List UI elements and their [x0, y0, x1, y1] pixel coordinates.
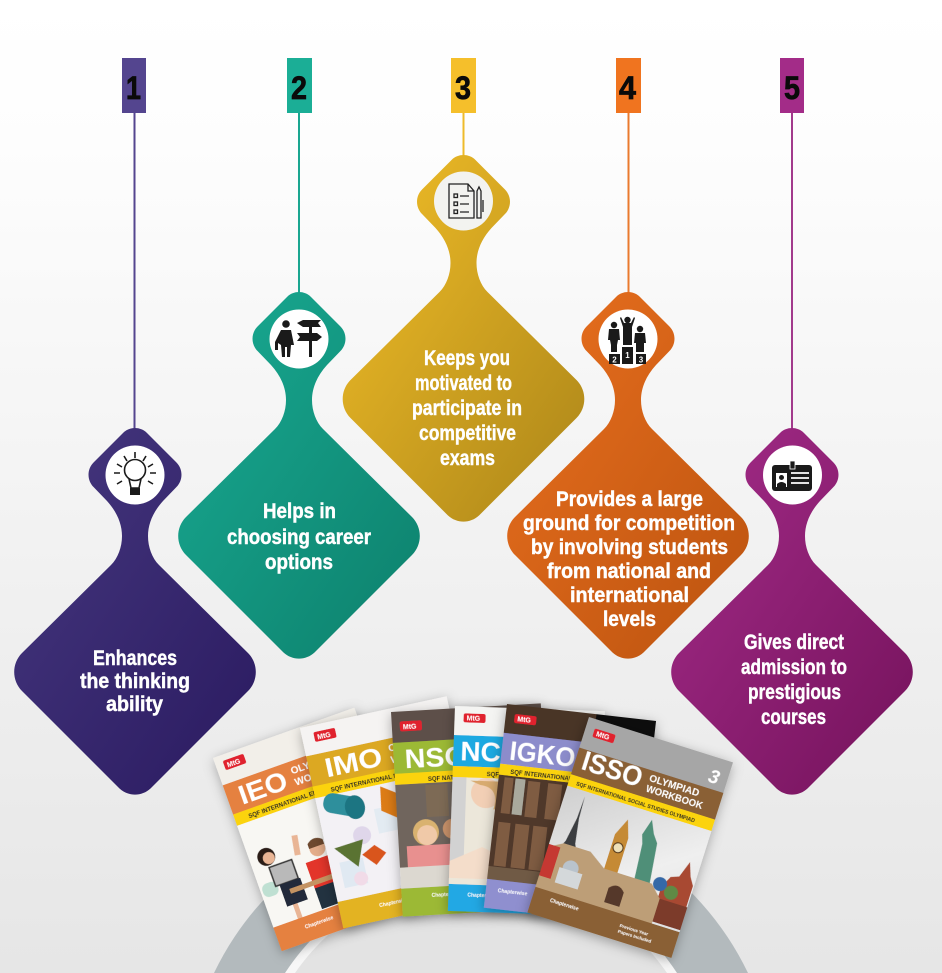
drop shape 1: [14, 428, 256, 795]
book: IEO: IEO: [234, 765, 292, 810]
item 5: direct admission: [671, 58, 913, 795]
text 3: motivated to: [415, 372, 512, 395]
text 4: from national and: [547, 560, 711, 583]
book: NCO: Chapterwise: [467, 893, 497, 900]
drop shape 4: [507, 292, 749, 659]
text 3: competitive: [419, 422, 516, 445]
book: ISSO: Previous Year: [619, 923, 649, 937]
text 2: Helps in: [263, 500, 336, 523]
book: NSO: MtG: [403, 724, 417, 731]
book: IMO: MtG: [317, 732, 332, 741]
book: IGKO: SQF INTERNATIONAL GENERAL: [510, 770, 604, 786]
book: IEO: SQF INTERNATIONAL ENGLISH OLYMPIAD: [248, 773, 367, 820]
number tag 4: 4: [619, 70, 636, 106]
item 2: career options: [178, 58, 420, 659]
text 4: Provides a large: [556, 488, 703, 511]
drop shape 2: [178, 292, 420, 659]
book: IEO: Chapterwise: [304, 915, 335, 931]
book: IEO: MtG: [226, 758, 242, 769]
book: ISSO: 3: [706, 766, 722, 790]
text 5: prestigious: [748, 681, 841, 704]
book: IMO: Chapterwise: [379, 897, 409, 909]
icon: checklist and pen: [434, 172, 493, 230]
text 2: options: [265, 551, 333, 574]
icon: person at signpost: [270, 310, 328, 368]
text 1: Enhances: [93, 647, 177, 670]
icon: podium: 2: [612, 356, 617, 364]
text 3: Keeps you: [424, 347, 510, 370]
text 2: [227, 500, 371, 574]
book: ISSO: Papers Included: [617, 929, 652, 944]
book: NSO: NSO: [404, 741, 468, 774]
drop shape 3: [343, 155, 584, 522]
book: ISSO: [527, 717, 733, 958]
book: IMO: WORKBOOK: [390, 742, 453, 766]
book: NSO: Chapterwise: [431, 891, 462, 899]
book: IMO: IMO: [322, 742, 385, 783]
books: fanned workbooks: [213, 696, 733, 958]
book: IGKO: IGKO: [508, 736, 577, 773]
text 4: by involving students: [531, 536, 728, 559]
book: NCO: NCO: [460, 736, 523, 768]
text 1: the thinking: [80, 670, 190, 693]
number tag 1: 1: [126, 70, 141, 106]
book: ISSO: ISSO: [578, 745, 647, 793]
text 1: [80, 647, 190, 716]
icon: podium: [598, 310, 658, 368]
book: IGKO: MtG: [517, 716, 532, 725]
book: IEO: [213, 708, 423, 951]
book: ISSO: OLYMPIAD: [648, 772, 701, 799]
icon: podium: 1: [625, 351, 630, 360]
number tag 3: 3: [455, 70, 471, 106]
text 4: levels: [603, 608, 656, 631]
text 5: courses: [761, 706, 826, 729]
book: IGKO: [484, 704, 656, 925]
book: NCO: MtG: [466, 715, 481, 723]
number tag 5: 5: [784, 70, 800, 106]
book: ISSO: SQF INTERNATIONAL SOCIAL STUDIES OLYMPIAD: [575, 781, 695, 824]
decorative arc behind books: [214, 805, 748, 973]
book: IMO: OLYMPIAD: [387, 733, 440, 755]
book: IEO: WORKBOOK: [293, 757, 356, 789]
text 2: choosing career: [227, 526, 371, 549]
book: NCO: SQF INTERNATIONAL CYBER: [487, 772, 572, 781]
icon: light bulb: [106, 446, 164, 504]
icon: ID card: [763, 446, 822, 504]
text 3: participate in: [412, 397, 522, 420]
number tag 4: [616, 58, 641, 294]
number tag 3: [451, 58, 476, 157]
drop shape 5: [671, 428, 913, 795]
icon: podium: 3: [639, 356, 644, 364]
text 5: admission to: [741, 656, 847, 679]
item 1: enhances thinking: [14, 58, 256, 795]
text 5: [741, 631, 847, 729]
book: IMO: SQF INTERNATIONAL MATHEMATICS: [330, 765, 437, 794]
text 5: Gives direct: [744, 631, 844, 654]
book: IEO: OLYMPIAD: [289, 749, 342, 777]
text 4: ground for competition: [523, 512, 735, 535]
book: NCO: [448, 706, 605, 916]
book: NSO: [391, 703, 553, 917]
number tag 5: [780, 58, 804, 430]
book: NSO: SQF NATIONAL SCIENCE OLYMPIAD: [428, 771, 534, 783]
text 4: [523, 488, 735, 631]
item 4: large competition ground: [507, 58, 749, 659]
number tag 1: [122, 58, 146, 430]
book: ISSO: Chapterwise: [549, 898, 579, 913]
book: ISSO: MtG: [595, 731, 611, 742]
text 3: [412, 347, 522, 470]
text 1: ability: [106, 693, 163, 716]
text 4: international: [570, 584, 689, 607]
number tag 2: 2: [291, 70, 307, 106]
book: IMO: [300, 696, 490, 928]
text 3: exams: [440, 447, 495, 470]
book: ISSO: WORKBOOK: [644, 783, 705, 812]
book: IGKO: Chapterwise: [497, 888, 528, 898]
item 3: motivation: [343, 58, 584, 522]
number tag 2: [287, 58, 312, 294]
